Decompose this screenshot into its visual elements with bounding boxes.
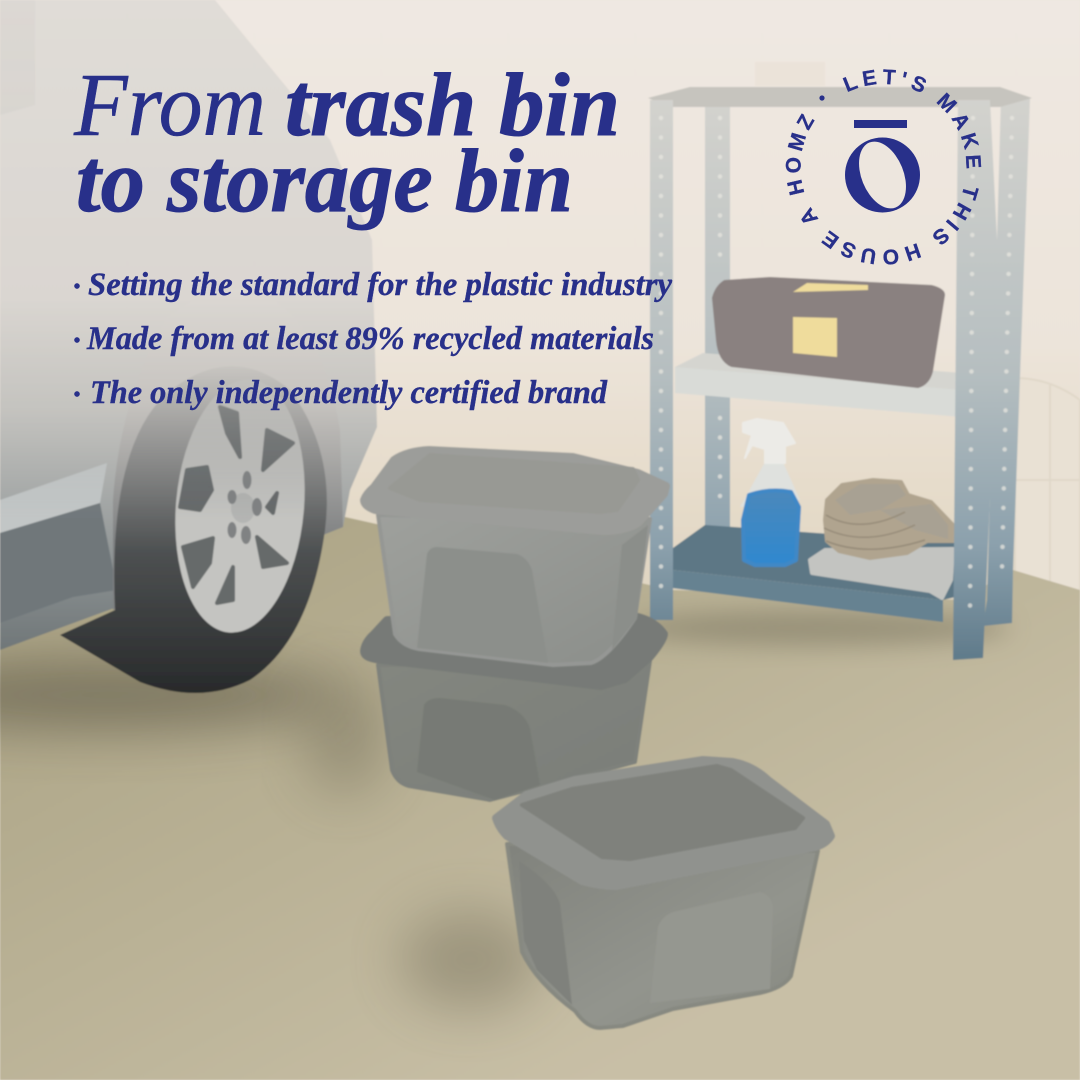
post perforations bbox=[661, 118, 1012, 610]
middle grey bin bbox=[364, 617, 664, 800]
bin front recess bbox=[650, 892, 773, 1003]
stacked hats bbox=[824, 480, 953, 558]
logo bar bbox=[854, 120, 907, 128]
wall background bbox=[0, 0, 1080, 620]
bin lid bbox=[364, 617, 664, 686]
title: trash bin bbox=[285, 56, 620, 155]
circular slogan: LET'S MAKE THIS HOUSE A HOMZ bbox=[786, 69, 982, 265]
shelf front left post bbox=[650, 100, 673, 620]
title: to storage bin bbox=[76, 132, 573, 231]
right wall panel bbox=[1015, 378, 1080, 600]
folded towels bbox=[810, 549, 953, 598]
shelf top bbox=[648, 87, 1032, 107]
bin recess bbox=[417, 698, 540, 800]
storage shelf bbox=[648, 62, 1032, 660]
car tyre bbox=[60, 366, 327, 693]
bin side recess bbox=[519, 861, 572, 1005]
front grey bin bbox=[496, 760, 831, 1028]
storage box on shelf bbox=[714, 279, 943, 386]
shelf front right post bbox=[953, 100, 998, 660]
lid inset bbox=[390, 455, 638, 512]
car bbox=[0, 0, 377, 693]
shelf rear right post bbox=[983, 98, 1030, 626]
car wheel rim bbox=[174, 390, 306, 634]
floor bbox=[0, 517, 1080, 1080]
bin lid bbox=[364, 450, 666, 531]
title: From bbox=[73, 56, 266, 155]
logo badge bbox=[786, 69, 982, 265]
bullet 2: Made from at least 89% recycled materials bbox=[86, 321, 654, 357]
bin side recess bbox=[612, 525, 648, 650]
trigger head bbox=[743, 419, 795, 463]
bin recess bbox=[417, 547, 548, 663]
blue liquid bbox=[743, 491, 799, 565]
bin body bbox=[378, 515, 650, 665]
car wheel arch bbox=[113, 289, 343, 610]
car side details bbox=[0, 464, 114, 622]
top grey bin bbox=[364, 450, 666, 665]
shadows on floor bbox=[0, 610, 1010, 1010]
bullet list bbox=[74, 267, 672, 411]
car body bbox=[0, 0, 377, 650]
spray bottle bbox=[740, 419, 800, 565]
bin body bbox=[507, 844, 818, 1028]
middle shelf bbox=[675, 353, 962, 417]
bullet 3: The only independently certified brand bbox=[90, 375, 607, 411]
bottle glass bbox=[740, 462, 800, 507]
lid inset bbox=[522, 766, 803, 859]
logo letter o bbox=[845, 135, 920, 215]
bin lid bbox=[496, 760, 831, 886]
bin body bbox=[378, 661, 650, 800]
pale item on top of shelf bbox=[755, 62, 825, 86]
shelf rear left post bbox=[705, 105, 730, 530]
slogan dot bbox=[819, 95, 825, 101]
title bbox=[73, 56, 620, 231]
yellow latch bbox=[793, 317, 837, 357]
bullet 1: Setting the standard for the plastic industry bbox=[88, 267, 672, 303]
lower shelf bbox=[672, 525, 957, 622]
